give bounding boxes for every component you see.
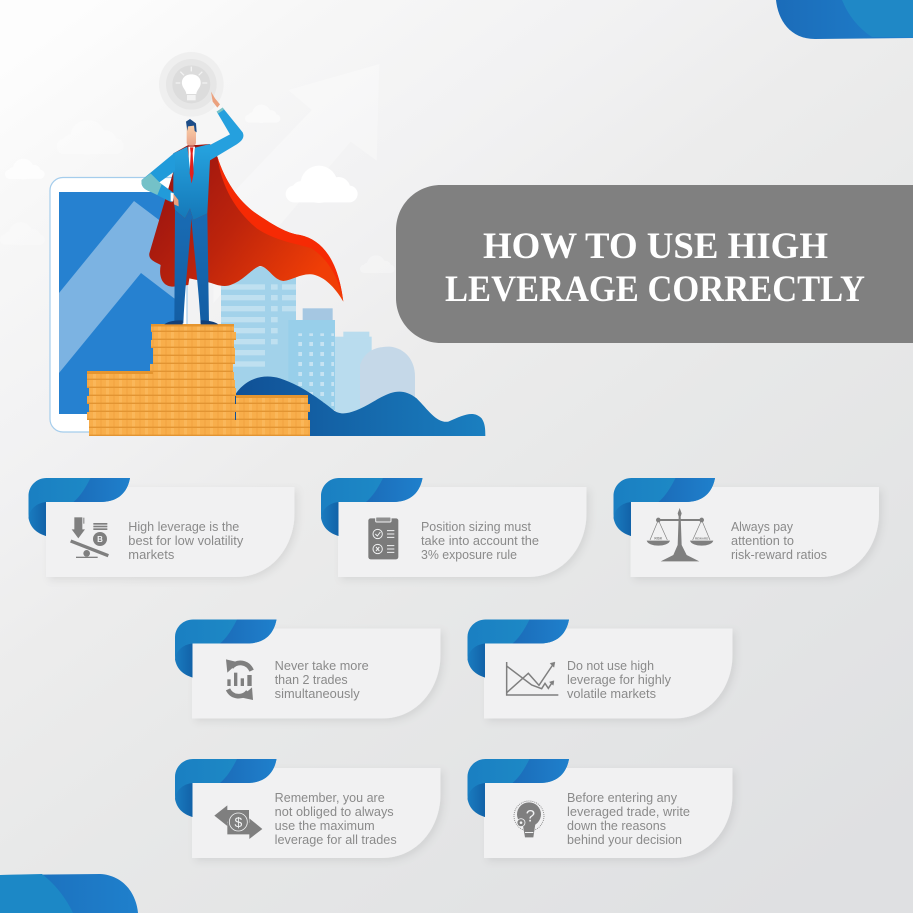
card text: markets [128, 548, 174, 562]
card text: Never take more [275, 659, 369, 673]
title second line: LEVERAGE CORRECTLY [445, 269, 865, 310]
hero illustration [0, 52, 485, 436]
icon: idea bulb with question mark [514, 801, 544, 837]
card text: take into account the [421, 534, 539, 548]
superhero businessman [141, 92, 343, 324]
card text: use the maximum [275, 819, 375, 833]
jacket [173, 144, 210, 220]
card text: Position sizing must [421, 520, 532, 534]
card text [275, 791, 397, 847]
icon: line chart [507, 662, 558, 695]
card text: 3% exposure rule [421, 548, 517, 562]
icon: idea bulb with question mark: ? [526, 806, 535, 825]
card text: not obliged to always [275, 805, 394, 819]
title text: HOW TO USE HIGH [483, 226, 828, 267]
icon: balance scales [647, 508, 713, 561]
raised arm [210, 108, 243, 160]
card text [421, 520, 539, 562]
bottom-left corner shape [0, 874, 138, 913]
card text: volatile markets [567, 687, 656, 701]
icon: dollar exchange arrows [214, 805, 262, 839]
icon: cycle arrows with bars [226, 659, 253, 700]
card text: best for low volatility [128, 534, 244, 548]
coin stacks [87, 324, 310, 436]
card: simultaneous trades [175, 620, 440, 718]
card text [275, 659, 369, 701]
card: risk-reward [614, 478, 879, 577]
title panel [396, 185, 913, 343]
legs [174, 208, 209, 323]
card text: Always pay [731, 520, 794, 534]
card text: Do not use high [567, 659, 654, 673]
card text: leveraged trade, write [567, 805, 690, 819]
card text: simultaneously [275, 687, 360, 701]
card text: Remember, you are [275, 791, 385, 805]
icon: seesaw with arrow and coin [71, 517, 108, 558]
card: write down reasons [468, 759, 732, 858]
card text: behind your decision [567, 833, 682, 847]
card text: Before entering any [567, 791, 678, 805]
tie [190, 147, 194, 183]
wave [213, 376, 485, 436]
cape [149, 144, 343, 302]
card text [567, 791, 690, 847]
card: low volatility [28, 478, 294, 577]
card text [128, 520, 244, 562]
shirt [188, 147, 195, 178]
card: maximum leverage [175, 759, 440, 858]
city buildings [221, 267, 415, 413]
icon: seesaw with arrow and coin: B [97, 535, 103, 544]
icon: checklist clipboard [368, 517, 398, 559]
card text: leverage for highly [567, 673, 672, 687]
card text: risk-reward ratios [731, 548, 827, 562]
card text [567, 659, 672, 701]
card text: down the reasons [567, 819, 666, 833]
left arm [141, 152, 175, 202]
icon: dollar exchange arrows: $ [234, 814, 242, 830]
card text: High leverage is the [128, 520, 239, 534]
background arrows and clouds [0, 64, 395, 303]
hand up [211, 92, 220, 108]
card: volatile markets [468, 620, 732, 718]
card text: than 2 trades [275, 673, 348, 687]
icon: balance scales: REWARD [695, 536, 709, 540]
card: position sizing [321, 478, 586, 577]
card text: leverage for all trades [275, 833, 397, 847]
card text: attention to [731, 534, 794, 548]
head [187, 125, 196, 146]
tablet [50, 178, 187, 432]
icon: light bulb [159, 52, 224, 117]
card text [731, 520, 827, 562]
icon: balance scales: RISK [654, 536, 663, 540]
top-right corner shape [776, 0, 913, 39]
